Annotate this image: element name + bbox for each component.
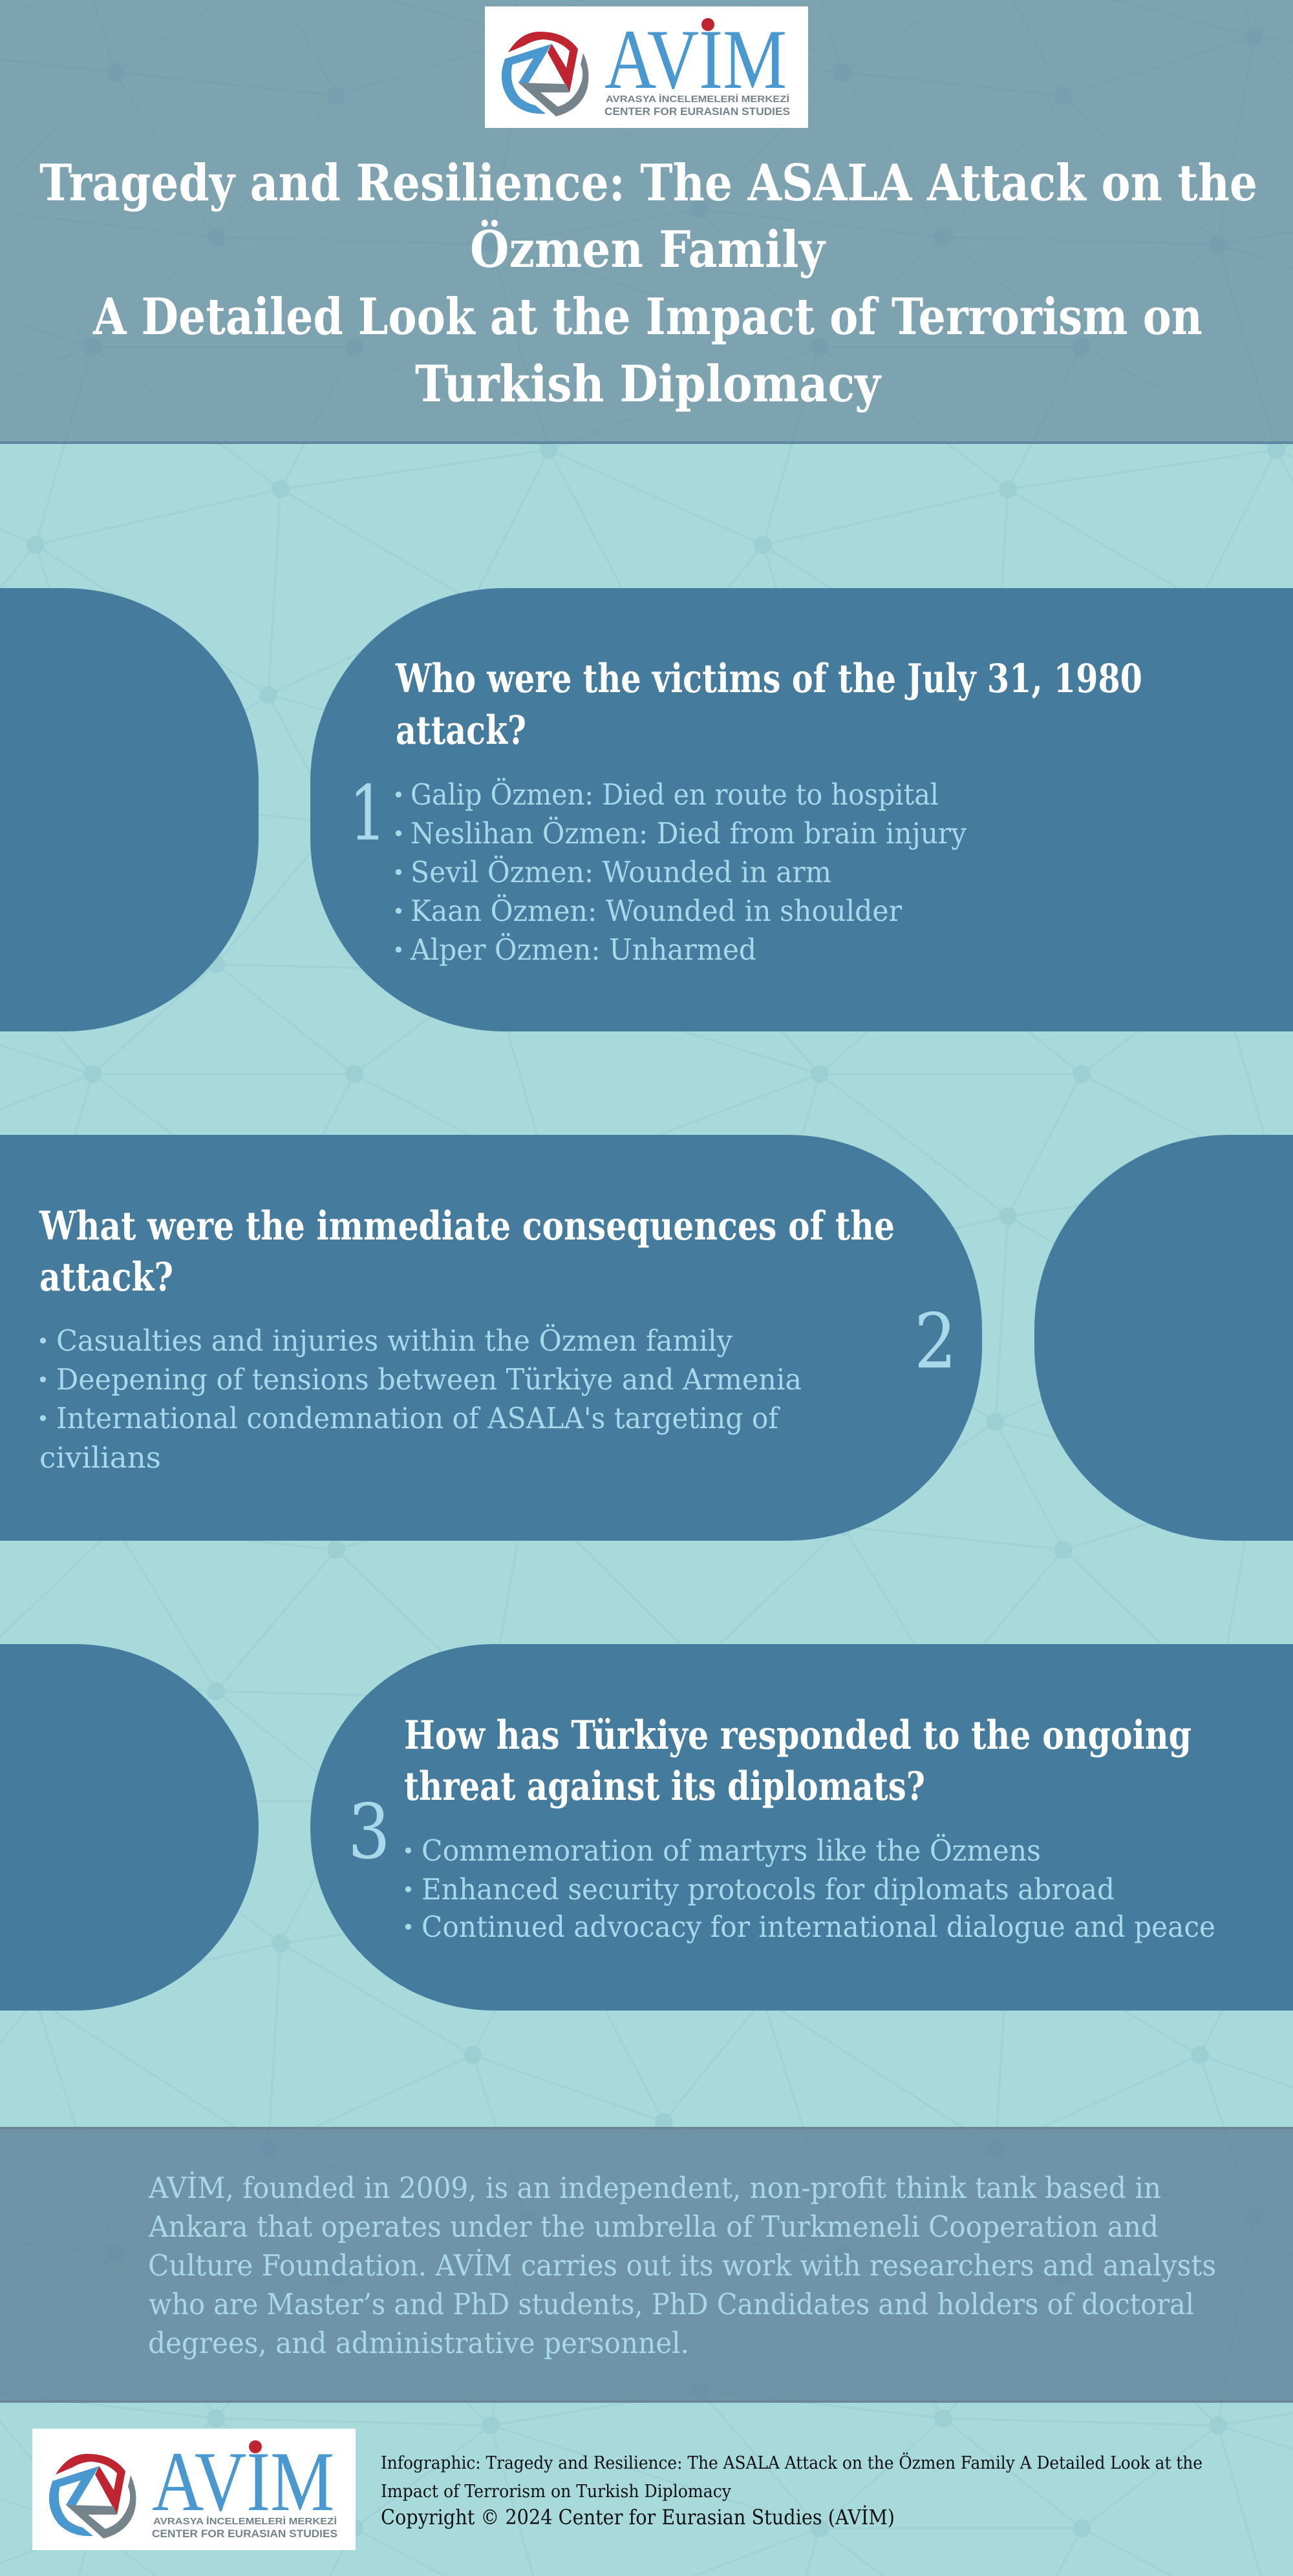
list 3: • <box>402 1915 414 1939</box>
list 1: Neslihan Özmen: Died from brain injury <box>411 816 967 850</box>
header band <box>0 0 1293 444</box>
footer logo <box>32 2429 356 2550</box>
heading 3: threat against its diplomats? <box>404 1764 925 1810</box>
list 3: • <box>402 1877 414 1902</box>
list 3 <box>402 1833 1215 1944</box>
header logo: AVRASYA İNCELEMELERİ MERKEZİ <box>606 94 789 105</box>
footer logo: AVRASYA İNCELEMELERİ MERKEZİ <box>153 2516 337 2527</box>
panel 2: consequences <box>0 1135 1293 1541</box>
list 2: Casualties and injuries within the Özmen family <box>56 1324 733 1358</box>
title <box>39 154 1257 414</box>
list 2: International condemnation of ASALA's targeting of <box>56 1401 780 1435</box>
list 1: Kaan Özmen: Wounded in shoulder <box>411 894 902 928</box>
heading 2 <box>39 1203 895 1300</box>
footer caption and copyright <box>381 2451 1202 2529</box>
list 2: • <box>37 1367 49 1392</box>
about text <box>148 2171 1216 2360</box>
list 1 <box>392 777 967 967</box>
footer logo: AVIM <box>152 2434 334 2529</box>
heading 1 <box>395 656 1142 754</box>
list 1: • <box>392 860 405 885</box>
list 3: Continued advocacy for international dialogue and peace <box>422 1910 1215 1944</box>
list 1: Galip Özmen: Died en route to hospital <box>411 777 939 812</box>
list 2: Deepening of tensions between Türkiye and Armenia <box>56 1362 802 1397</box>
header logo: CENTER FOR EURASIAN STUDIES <box>604 106 790 118</box>
title: Turkish Diplomacy <box>415 355 882 414</box>
about band <box>0 2127 1293 2403</box>
list 1: • <box>392 938 405 962</box>
list 1: • <box>392 899 405 924</box>
list 2: • <box>37 1329 49 1353</box>
list 1: Alper Özmen: Unharmed <box>410 933 756 967</box>
number 1: 1 <box>349 769 387 858</box>
about text: AVİM, founded in 2009, is an independent, non-profit think tank based in <box>148 2171 1161 2205</box>
panel 3: response <box>0 1644 1293 2011</box>
list 3: Commemoration of martyrs like the Özmens <box>422 1833 1041 1868</box>
list 3: • <box>402 1839 414 1863</box>
footer caption and copyright: Infographic: Tragedy and Resilience: The ASALA Attack on the Özmen Family A Detailed Look at the <box>381 2451 1202 2473</box>
about text: Culture Foundation. AVİM carries out its work with researchers and analysts <box>148 2248 1216 2283</box>
footer caption and copyright: Copyright © 2024 Center for Eurasian Studies (AVİM) <box>381 2505 895 2529</box>
list 1: • <box>392 821 405 846</box>
list 2: • <box>37 1406 49 1431</box>
heading 2: What were the immediate consequences of the <box>39 1203 895 1249</box>
number 3: 3 <box>348 1788 390 1876</box>
heading 2: attack? <box>39 1254 173 1300</box>
title: Özmen Family <box>470 219 826 279</box>
header logo <box>485 6 808 128</box>
list 1: Sevil Özmen: Wounded in arm <box>411 855 831 889</box>
about text: Ankara that operates under the umbrella of Turkmeneli Cooperation and <box>148 2210 1159 2244</box>
footer caption and copyright: Impact of Terrorism on Turkish Diplomacy <box>381 2482 732 2502</box>
about text: degrees, and administrative personnel. <box>148 2326 689 2360</box>
list 1: • <box>392 783 405 807</box>
heading 1: Who were the victims of the July 31, 1980 <box>395 656 1142 702</box>
panel 1: victims <box>0 588 1293 1031</box>
number 2: 2 <box>914 1297 957 1386</box>
list 2: civilians <box>39 1441 161 1475</box>
heading 1: attack? <box>396 708 526 754</box>
about text: who are Master’s and PhD students, PhD Candidates and holders of doctoral <box>149 2287 1194 2321</box>
list 3: Enhanced security protocols for diplomats abroad <box>422 1872 1115 1906</box>
footer logo: CENTER FOR EURASIAN STUDIES <box>152 2528 337 2540</box>
header logo: AVIM <box>604 12 787 107</box>
heading 3 <box>404 1713 1191 1810</box>
list 2 <box>37 1324 802 1475</box>
